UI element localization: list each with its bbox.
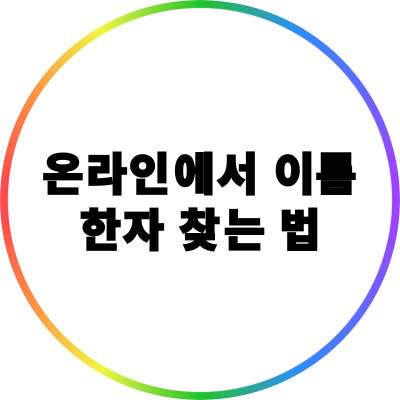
title line 1: 에 (174, 151, 215, 200)
title line 2: 자 (123, 207, 164, 256)
title line 2: 찾 (179, 207, 220, 256)
title line 1: 온 (42, 151, 83, 200)
title line 1: 이 (274, 151, 315, 200)
title line 1: 라 (86, 151, 127, 200)
title line 2: 는 (224, 207, 265, 256)
title line 1: 인 (129, 151, 170, 200)
title line 2: 법 (280, 207, 320, 256)
title line 2: 한 (80, 207, 121, 256)
title line 1: 서 (217, 151, 258, 200)
title line 1: 름 (316, 151, 356, 200)
